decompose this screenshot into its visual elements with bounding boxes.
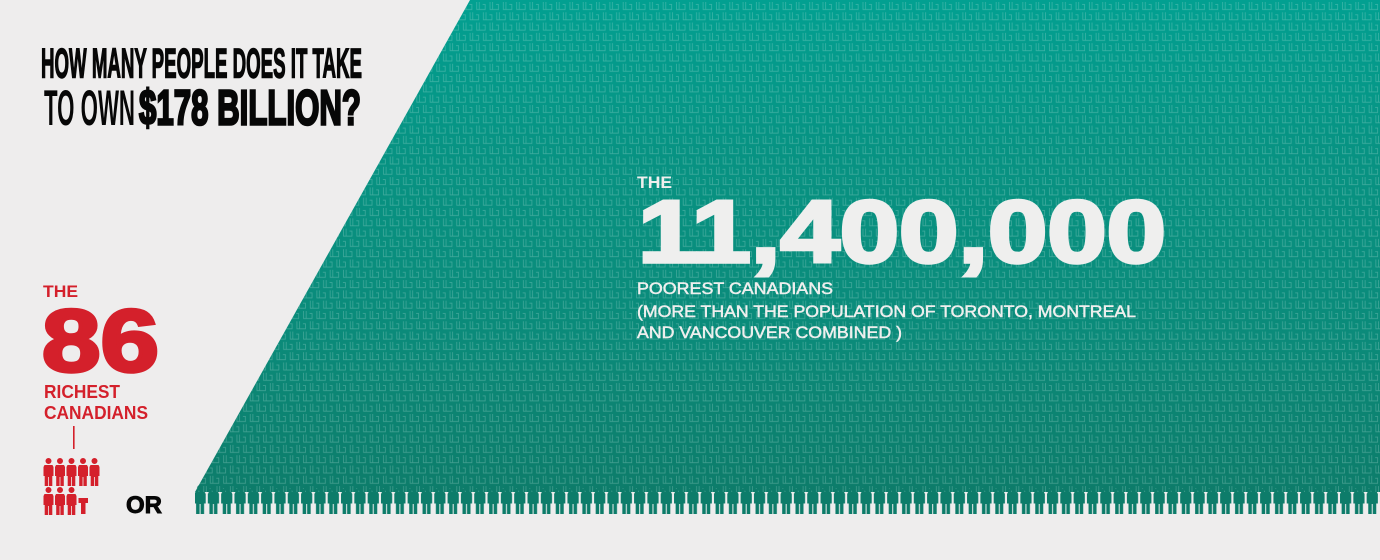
description: POOREST CANADIANS (637, 279, 833, 298)
callout: 86 richest Canadians (42, 282, 159, 423)
number: 86: 86 (42, 291, 159, 390)
label: the: THE (637, 174, 672, 192)
icon: 86 red figures (44, 458, 100, 515)
connector line (73, 426, 75, 449)
infographic canvas: HOW MANY PEOPLE DOES IT TAKE (41, 40, 362, 86)
teal crowd mass (190, 0, 1380, 495)
title: TO OWN (44, 80, 135, 136)
bottom row of figures (195, 484, 1380, 515)
description: (MORE THAN THE POPULATION OF TORONTO, MONTREAL (637, 302, 1136, 321)
number: 11,400,000: 11,400,000 (638, 182, 1166, 281)
description (637, 279, 1136, 342)
label: richest Canadians: CANADIANS (44, 403, 148, 423)
title: $178 BILLION? (139, 82, 361, 136)
label: or: OR (126, 492, 162, 519)
title (41, 40, 362, 136)
label: richest Canadians: RICHEST (44, 382, 120, 402)
callout: 11,400,000 poorest Canadians (637, 174, 1166, 342)
label: the: THE (43, 282, 78, 301)
panel: crowd of poorest Canadians (190, 0, 1380, 515)
description: AND VANCOUVER COMBINED ) (637, 323, 902, 342)
